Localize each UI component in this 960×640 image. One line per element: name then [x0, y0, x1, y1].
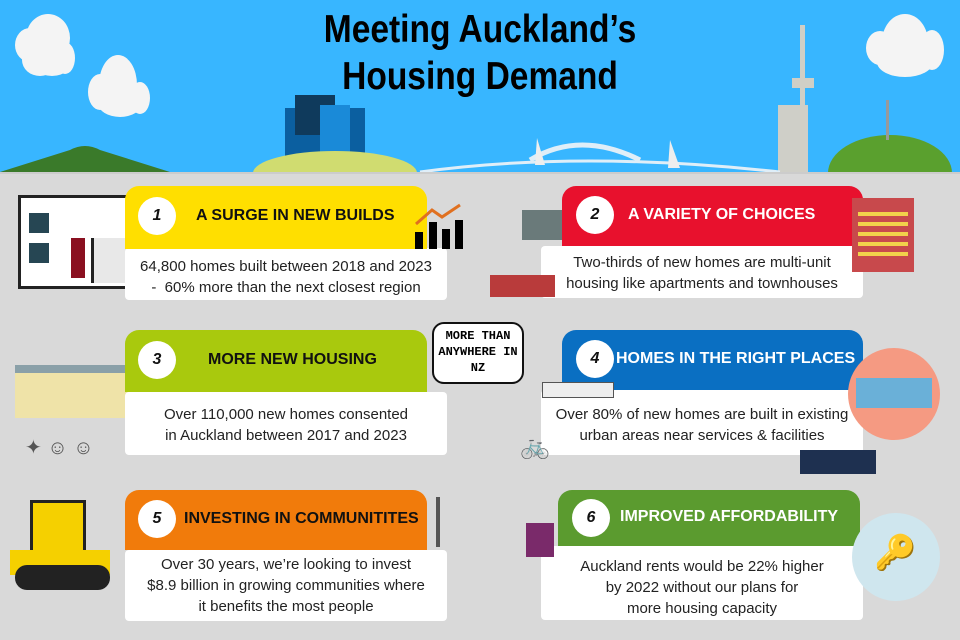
- panel: 6 affordability: by 2022 without our plans for: [606, 579, 798, 596]
- callout: [432, 322, 524, 384]
- header banner: [0, 0, 960, 173]
- icon: apartment: [852, 198, 914, 272]
- panel: 2 variety of choices: [490, 186, 914, 298]
- panel: 6 affordability: 6: [587, 509, 595, 526]
- panel: 1 surge in new builds: 64,800 homes built between 2018 and 2023: [140, 258, 432, 275]
- panel: 3 more new housing: in Auckland between 2017 and 2023: [165, 427, 407, 444]
- icon: townhouses: [490, 275, 555, 297]
- panel: 3 more new housing: 3: [153, 351, 161, 368]
- icon: key in hand: 🔑: [874, 534, 916, 572]
- icon: clouds: [15, 14, 944, 117]
- panel: 5 investing: INVESTING IN COMMUNITITES: [184, 510, 419, 527]
- panel: 4 homes in right places: HOMES IN THE RIGHT PLACES: [616, 350, 855, 367]
- panel: 1 surge in new builds: A SURGE IN NEW BUILDS: [196, 207, 395, 224]
- panel: 6 affordability: Auckland rents would be 22% higher: [580, 558, 824, 575]
- icon: house: [18, 195, 142, 289]
- icon: train: [542, 382, 614, 398]
- panel: 5 investing: [10, 490, 447, 621]
- panel: 6 affordability: IMPROVED AFFORDABILITY: [620, 508, 838, 525]
- panel: 2 variety of choices: 2: [591, 206, 599, 223]
- icon: bike: 🚲: [520, 433, 550, 460]
- title: [324, 8, 636, 98]
- panel: 2 variety of choices: A VARIETY OF CHOICES: [628, 206, 815, 223]
- panel: 6 affordability: [526, 490, 940, 620]
- icon: key in hand: [852, 513, 940, 601]
- icon: house: [15, 365, 137, 418]
- icon: digger: [10, 500, 110, 590]
- icon: bar chart: [415, 204, 463, 249]
- panel: 3 more new housing: MORE NEW HOUSING: [208, 351, 377, 368]
- callout: MORE THAN ANYWHERE IN NZ: [438, 329, 518, 375]
- icon: shops circle: [848, 348, 940, 440]
- panel: 4 homes in right places: [520, 330, 940, 474]
- title: Housing Demand: [342, 55, 618, 98]
- panel: 2 variety of choices: housing like apartments and townhouses: [566, 275, 838, 292]
- panel: 1 surge in new builds: 1: [153, 207, 161, 224]
- skyline: [0, 25, 960, 174]
- panel: 5 investing: 5: [153, 510, 161, 527]
- icon: calculator: [526, 523, 554, 557]
- panel: 3 more new housing: [15, 322, 524, 459]
- panel: 6 affordability: more housing capacity: [627, 600, 777, 617]
- panel: 4 homes in right places: Over 80% of new homes are built in existing: [556, 406, 848, 423]
- panel: 5 investing: $8.9 billion in growing communities where: [147, 577, 425, 594]
- panel: 2 variety of choices: Two-thirds of new homes are multi-unit: [573, 254, 831, 271]
- icon: bus: [800, 450, 876, 474]
- panel: 1 surge in new builds: - 60% more than the next closest region: [151, 279, 421, 296]
- panel: 4 homes in right places: urban areas near services & facilities: [579, 427, 825, 444]
- panel: 5 investing: it benefits the most people: [198, 598, 374, 615]
- panel: 5 investing: Over 30 years, we’re looking to invest: [161, 556, 411, 573]
- panel: 3 more new housing: Over 110,000 new homes consented: [164, 406, 408, 423]
- icon: shovel: [436, 497, 440, 547]
- panel: 4 homes in right places: 4: [591, 350, 599, 367]
- icon: building small: [522, 210, 562, 240]
- panel: 1 surge in new builds: [18, 186, 463, 300]
- icon: kids: ✦ ☺ ☺: [25, 437, 94, 459]
- title: Meeting Auckland’s: [324, 8, 636, 51]
